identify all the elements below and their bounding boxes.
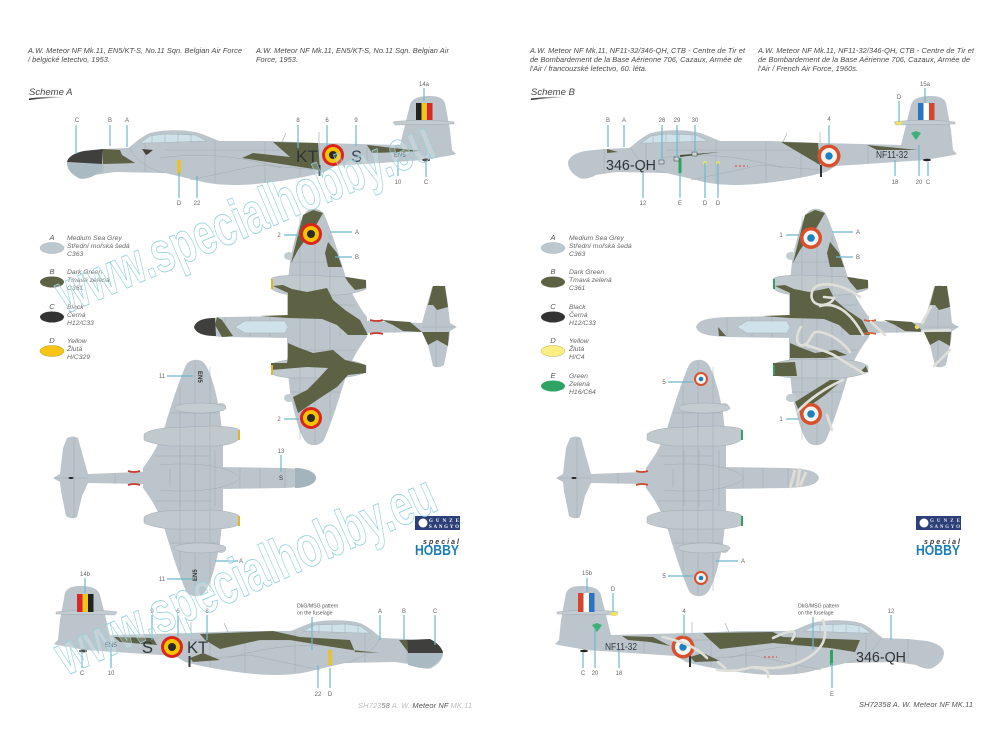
aircraft: scheme B right side view: NF11-32 [605,641,637,653]
swatch: yellow: Yellow [67,338,88,345]
callouts: scheme A right side view: C [433,609,438,615]
callouts: scheme A side view: D [177,201,182,207]
callouts: scheme A right side view: D [328,692,333,698]
swatch: black: Black [67,304,84,311]
swatch: yellow: Žlutá [66,344,82,353]
callouts: scheme B right side view: C [581,671,586,677]
aircraft: scheme B right side view [555,586,944,677]
header text: scheme A English caption: Force, 1953. [256,55,298,64]
swatch: green: Green [569,373,588,380]
swatch: black: C [550,302,556,311]
callouts: scheme B side view: 12 [640,201,647,207]
callouts: scheme A side view: C [424,180,429,186]
callouts: scheme A right side view: C [80,671,85,677]
callouts: scheme A top view [277,230,359,423]
callouts: scheme A right side view: 8 [205,609,209,615]
swatch: medium sea grey: Střední mořská šedá [569,243,632,250]
callouts: scheme B side view: D [897,95,902,101]
callouts: scheme A right side view: 22 [315,692,322,698]
callouts: scheme A right side view: 14b [80,572,91,578]
aircraft: scheme A left side view: EN5 [394,153,406,159]
swatch: dark green: B [49,267,55,276]
header text: scheme A English caption: A.W. Meteor NF Mk.11, EN5/KT-S, No.11 Sqn. Belgian Air [255,46,450,55]
swatch: medium sea grey [541,233,632,258]
callouts: scheme A right side view: 10 [108,671,115,677]
callouts: scheme B right side view: D [611,587,616,593]
callouts: scheme B underside view: 5 [662,574,666,580]
callouts: scheme B right side view: E [830,692,834,698]
swatch: medium sea grey: C363 [67,251,83,258]
swatch: yellow: D [550,336,556,345]
header text: scheme B Czech caption: de Bombardement de la Base Aérienne 706, Cazaux, Armée de [530,55,742,64]
swatch: black: Black [569,304,586,311]
callouts: scheme B right side view: DkG/MSG pattern [798,604,839,610]
logo: Gunze Sangyo, scheme A: GUNZE [429,519,460,524]
swatch: black: H12/C33 [569,320,596,327]
watermark: lower www.specialhobby.eu: www.specialhobby.eu [44,462,446,688]
callouts: scheme B side view: 26 [659,118,666,124]
callouts: scheme B underside view [662,380,745,580]
aircraft: scheme A underside view: EN5 [193,569,199,581]
aircraft: scheme B top view [696,209,959,445]
aircraft: scheme A right side view: EN5 [105,643,117,649]
callouts: scheme A top view: 2 [277,417,281,423]
footer: scheme B product line: SH72358 A. W. Meteor NF MK.11 [859,700,973,709]
callouts: scheme B side view: D [703,201,708,207]
swatch: medium sea grey: C363 [569,251,585,258]
swatch: yellow: Žlutá [568,344,584,353]
logo: Gunze Sangyo, scheme B: GUNZE [930,519,961,524]
swatch: yellow: H/C329 [67,354,90,361]
callouts: scheme B right side view [581,571,895,698]
callouts: scheme B top view [779,230,860,423]
aircraft: scheme A underside view: S [279,476,283,482]
swatch: yellow [541,336,590,361]
watermark: upper www.specialhobby.eu: www.specialhobby.eu [45,108,444,326]
swatch: yellow: H/C4 [569,354,585,361]
aircraft: scheme A left side view: S [351,148,362,166]
callouts: scheme B side view: E [678,201,682,207]
callouts: scheme B side view: 18 [892,180,899,186]
callouts: scheme B side view: C [926,180,931,186]
callouts: scheme B side view: 29 [674,118,681,124]
swatch: medium sea grey: A [48,233,55,242]
logo: Special Hobby, scheme B: HOBBY [916,543,960,559]
logo: Special Hobby, scheme A: special [423,539,460,546]
swatch: black: Černá [569,310,588,319]
callouts: scheme B side view: A [622,118,626,124]
header text: scheme B English caption: l'Air / French Air Force, 1960s. [758,64,858,73]
callouts: scheme B top view: A [856,230,860,236]
logo: Gunze Sangyo, scheme A [415,516,460,530]
aircraft: scheme A top view [194,209,457,445]
swatch: black [541,302,596,327]
swatch: black: Černá [67,310,86,319]
callouts: scheme A side view: 9 [354,118,358,124]
swatch: yellow: Yellow [569,338,590,345]
swatch: green: E [550,371,556,380]
logo: Special Hobby, scheme B: special [924,539,961,546]
aircraft: scheme A underside view: EN5 [196,371,202,383]
callouts: scheme A top view: B [355,255,359,261]
callouts: scheme B side view: 30 [692,118,699,124]
swatch: dark green: C361 [569,285,585,292]
callouts: scheme B right side view: 15b [582,571,593,577]
aircraft: scheme A right side view: S [142,639,153,657]
header text: scheme A Czech caption: A.W. Meteor NF Mk.11, EN5/KT-S, No.11 Sqn. Belgian Air Force [27,46,242,55]
aircraft: scheme B left side view: 346-QH [606,158,656,174]
header text: scheme B English caption: A.W. Meteor NF Mk.11, NF11-32/346-QH, CTB - Centre de Tir et [757,46,975,55]
logo: Special Hobby, scheme A: HOBBY [415,543,459,559]
legend: scheme B colours [541,233,632,396]
heading: Scheme B: Scheme B [531,87,575,98]
swatch: dark green: B [550,267,556,276]
callouts: scheme B underside view: 5 [662,380,666,386]
swatch: dark green [541,267,612,292]
callouts: scheme A side view: B [108,118,112,124]
legend: scheme A colours [40,233,130,361]
aircraft: scheme B right side view: 346-QH [856,650,906,666]
swatch: black: C [49,302,55,311]
callouts: scheme A side view: A [125,118,129,124]
callouts: scheme A right side view: 9 [150,609,154,615]
logo: Gunze Sangyo, scheme B: SANGYO [930,525,960,530]
callouts: scheme A underside view: 11 [159,374,166,380]
callouts: scheme A right side view: B [402,609,406,615]
callouts: scheme A side view: 22 [194,201,201,207]
callouts: scheme A underside view: A [239,559,243,565]
aircraft: scheme B underside view [556,360,819,596]
swatch: yellow [40,336,90,361]
callouts: scheme A side view: C [75,118,80,124]
swatch: medium sea grey: Medium Sea Grey [67,235,122,242]
header text: scheme A Czech caption: / belgické letectvo, 1953. [27,55,110,64]
callouts: scheme B underside view: A [741,559,745,565]
swatch: green: H16/C64 [569,389,596,396]
aircraft: scheme B left side view [568,96,957,185]
swatch: dark green: Dark Green [67,269,102,276]
callouts: scheme B side view: D [716,201,721,207]
callouts: scheme A top view: A [355,230,359,236]
callouts: scheme A right side view: 6 [176,609,180,615]
swatch: medium sea grey: Medium Sea Grey [569,235,624,242]
header text: scheme B English caption: de Bombardement de la Base Aérienne 706, Cazaux, Armée de [758,55,970,64]
aircraft: scheme A left side view: KT [296,148,318,166]
header text: scheme B Czech caption: A.W. Meteor NF Mk.11, NF11-32/346-QH, CTB - Centre de Tir et [529,46,746,55]
callouts: scheme A top view: 2 [277,233,281,239]
callouts: scheme B side view: 20 [916,180,923,186]
swatch: dark green: Dark Green [569,269,604,276]
callouts: scheme A right side view [80,572,438,698]
header text: scheme B Czech caption: l'Air / francouzské letectvo, 60. léta. [530,64,647,73]
aircraft: scheme A right side view: KT [187,639,208,657]
callouts: scheme A underside view: 13 [278,449,285,455]
logo: Gunze Sangyo, scheme A: SANGYO [429,525,459,530]
callouts: scheme A side view: 10 [395,180,402,186]
callouts: scheme B top view: B [856,255,860,261]
aircraft: scheme A left side view [67,96,456,185]
callouts: scheme B right side view: 4 [682,609,686,615]
swatch: dark green [40,267,110,292]
callouts: scheme B right side view: on the fuselage [798,610,834,616]
callouts: scheme A underside view [159,374,285,583]
callouts: scheme A side view: 6 [325,118,329,124]
swatch: black [40,302,94,327]
footer: scheme A product line: SH72358 A. W. Meteor NF MK.11 [358,701,472,710]
swatch: medium sea grey [40,233,130,258]
aircraft: scheme A right side view [54,586,443,675]
callouts: scheme A side view: 14a [419,82,430,88]
swatch: green: Zelená [568,381,590,388]
callouts: scheme A side view: 8 [296,118,300,124]
callouts: scheme A right side view: on the fuselage [297,610,333,616]
swatch: medium sea grey: Střední mořská šedá [67,243,130,250]
callouts: scheme B top view: 1 [779,233,783,239]
swatch: green [541,371,596,396]
logo: Gunze Sangyo, scheme B [916,516,961,530]
callouts: scheme B side view [606,82,931,207]
callouts: scheme B top view: 1 [779,417,783,423]
swatch: dark green: Tmavá zelená [67,277,110,284]
callouts: scheme B side view: B [606,118,610,124]
aircraft: scheme B left side view: NF11-32 [876,149,908,161]
swatch: yellow: D [49,336,55,345]
callouts: scheme A right side view: DkG/MSG pattern [297,604,338,610]
callouts: scheme B right side view: 12 [888,609,895,615]
callouts: scheme B side view: 4 [827,117,831,123]
callouts: scheme A side view [75,82,430,207]
heading: Scheme A: Scheme A [29,87,72,98]
callouts: scheme A underside view: 11 [159,577,166,583]
swatch: medium sea grey: A [549,233,556,242]
swatch: dark green: C361 [67,285,83,292]
callouts: scheme B right side view: 20 [592,671,599,677]
aircraft: scheme A underside view [53,360,316,596]
callouts: scheme A right side view: A [378,609,382,615]
swatch: dark green: Tmavá zelená [569,277,612,284]
callouts: scheme B side view: 15a [920,82,931,88]
swatch: black: H12/C33 [67,320,94,327]
callouts: scheme B right side view: 18 [616,671,623,677]
